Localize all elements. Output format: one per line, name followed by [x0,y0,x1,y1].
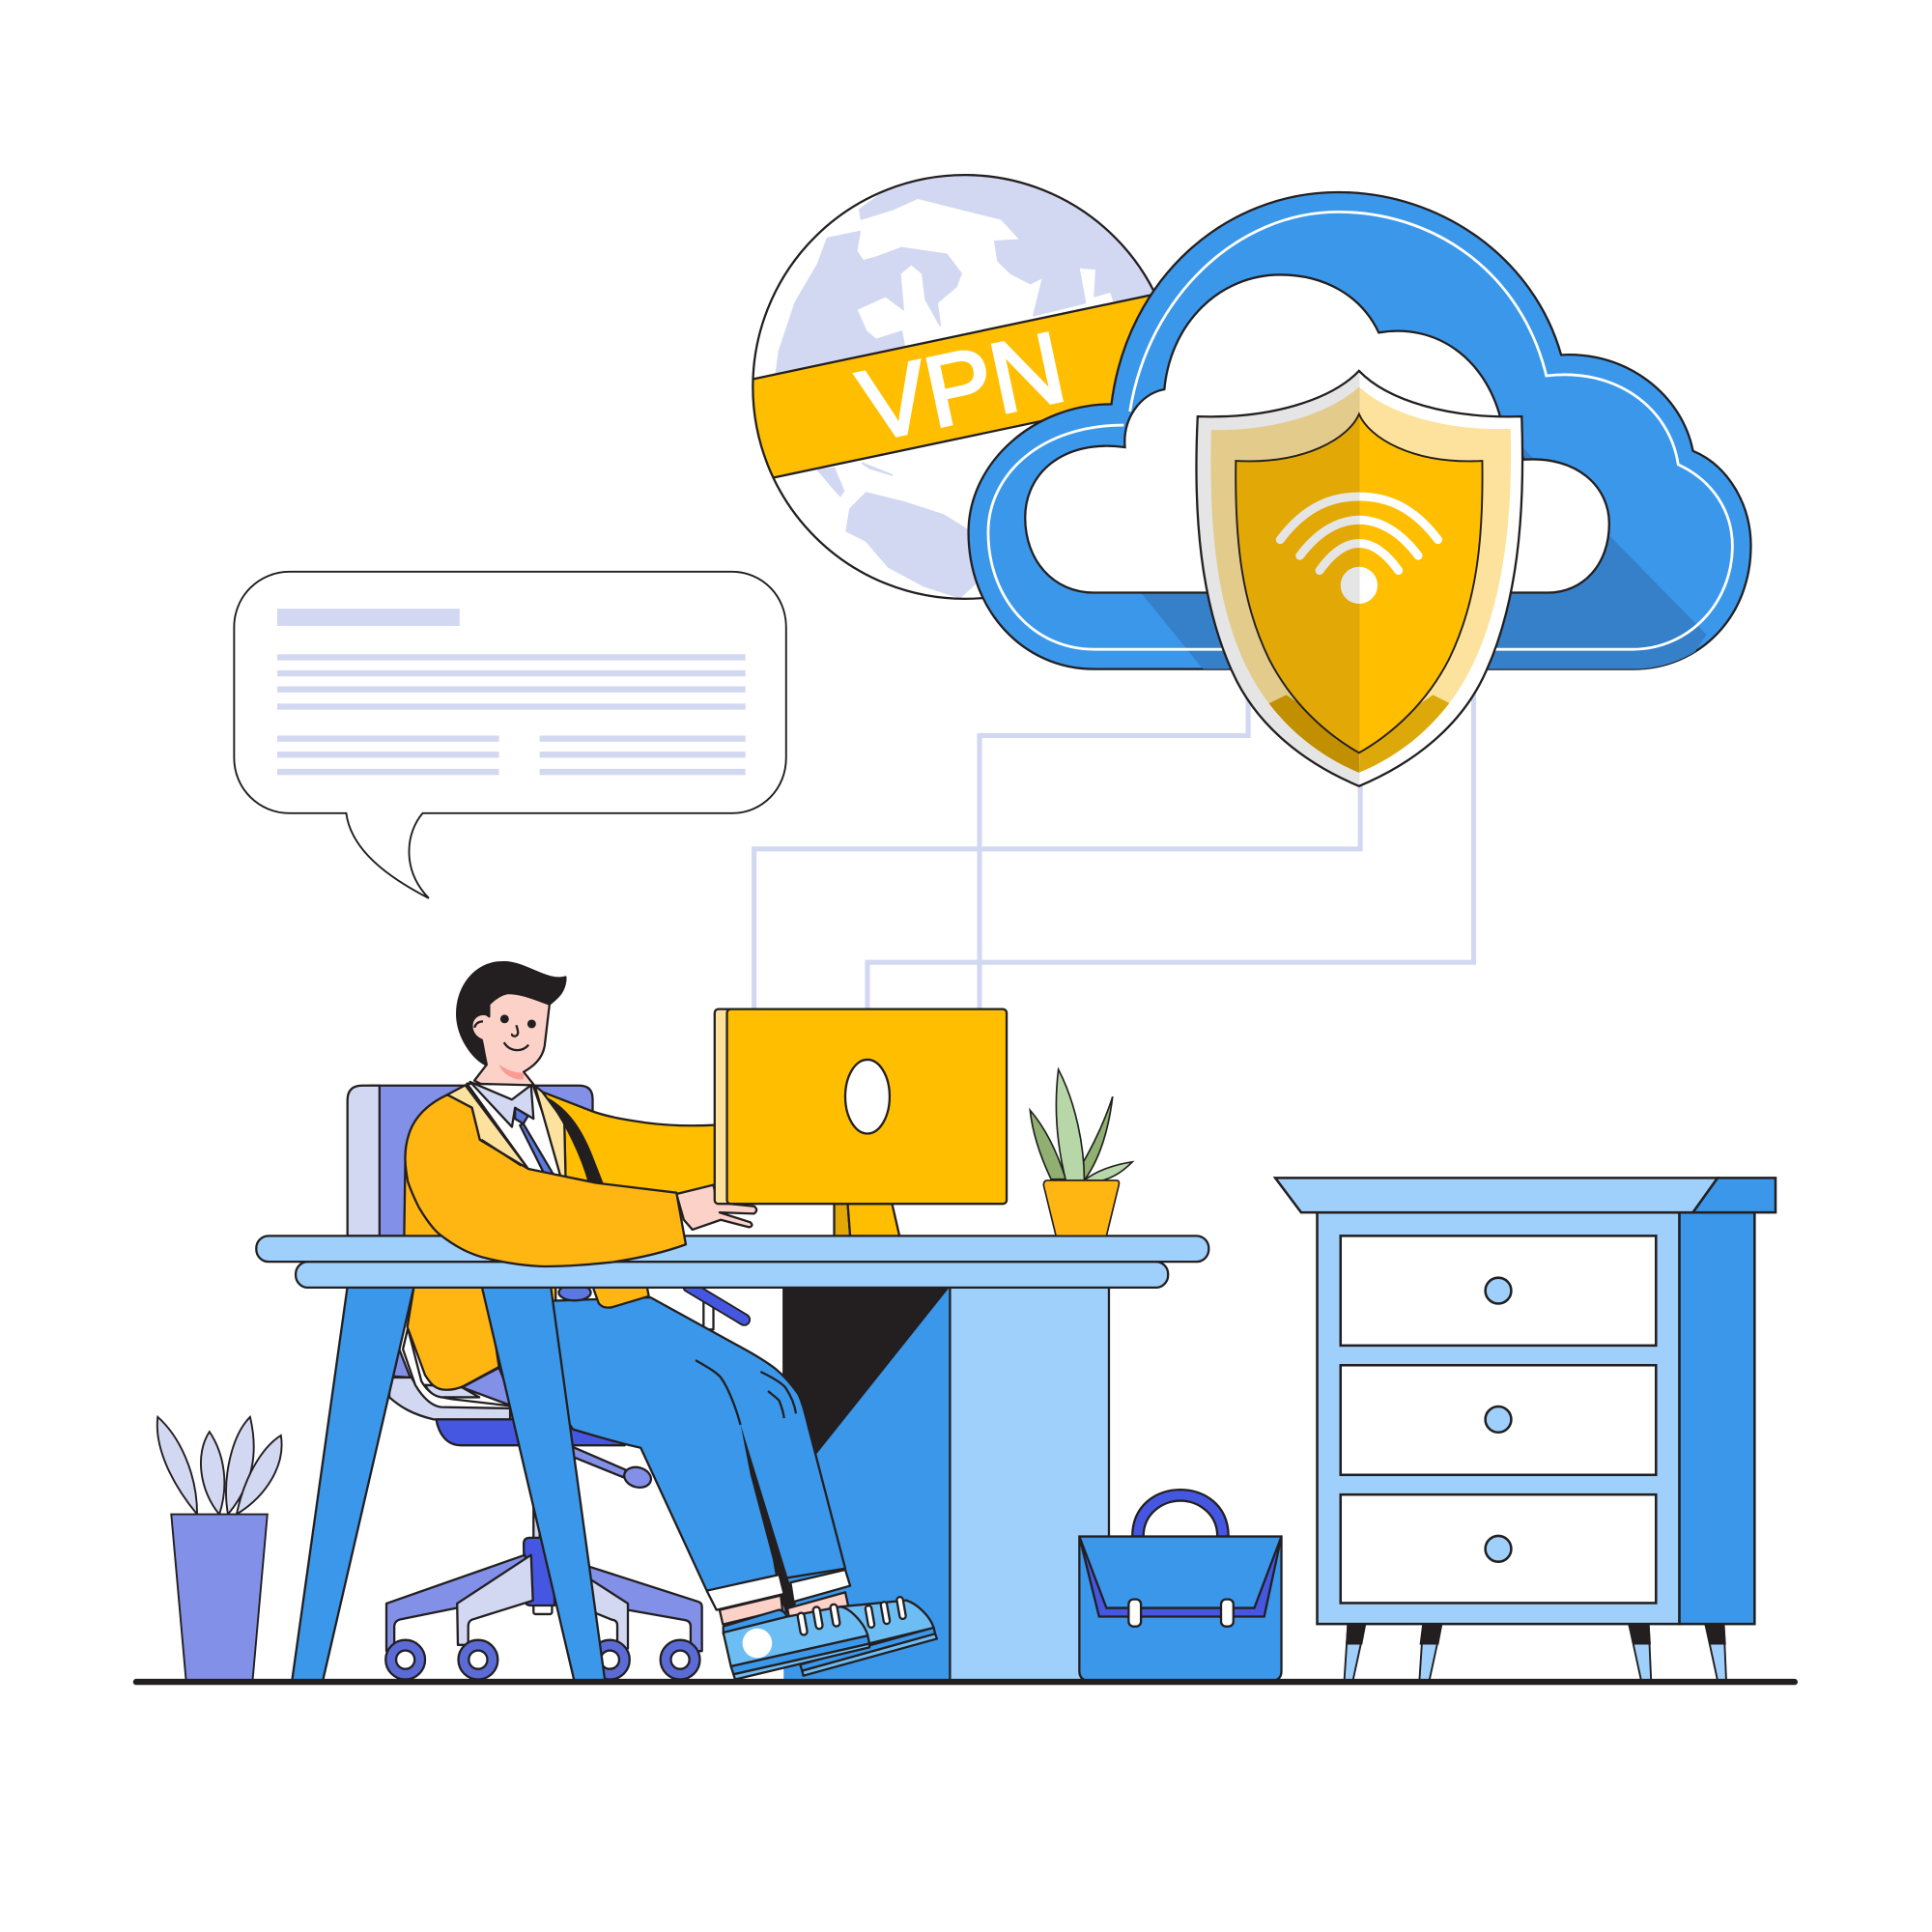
eyes [500,1014,536,1028]
briefcase [1079,1490,1282,1681]
cabinet legs [1345,1624,1726,1681]
briefcase clasps [1128,1600,1234,1627]
shield inner panel [1236,414,1483,753]
globe land masses [775,176,1152,598]
cabinet [1275,1178,1776,1681]
far arm [538,1091,717,1205]
desk pedestal [783,1287,1109,1681]
chair armrest [552,1287,744,1329]
briefcase flap [1079,1537,1282,1616]
office chair [348,1086,744,1680]
VPN label: VPN [850,310,1074,463]
desk plant pot [1043,1180,1119,1236]
bubble text placeholder [277,654,746,775]
jacket back [404,1095,456,1237]
far shoe [800,1597,937,1676]
chair backrest [348,1086,593,1236]
bag strap [549,1099,603,1184]
VPN band [753,294,1151,479]
shield gold border [1210,386,1511,773]
cloud opening [1025,274,1609,593]
chair column [524,1501,554,1614]
speech bubble [234,572,786,898]
floor line [133,1679,1798,1685]
drawer 1 [1341,1236,1656,1346]
globe [752,174,1153,600]
globe outline [753,175,1177,599]
chair wheels [385,1640,699,1680]
monitor [715,1009,1007,1204]
desk legs [292,1287,605,1681]
jacket lower [408,1287,555,1407]
sleeve [405,1094,686,1266]
icon: wifi [1280,497,1438,604]
head and neck [471,993,550,1100]
cabinet body [1318,1212,1680,1624]
shirt [467,1084,565,1177]
briefcase handle [1132,1490,1229,1537]
floor plant [157,1417,282,1681]
pants [529,1297,845,1614]
chair seat [389,1328,653,1491]
neck shadow [499,1065,524,1079]
cloud shadow [1141,438,1707,671]
cabinet top [1275,1178,1776,1212]
desk top [256,1236,1208,1288]
belt buckle [558,1285,591,1300]
ankles [720,1592,848,1625]
trouser cuffs [707,1570,850,1610]
drawer 2 [1341,1365,1656,1475]
collar [470,1082,533,1127]
lapels [447,1085,565,1177]
cloud inner white line [988,212,1732,649]
tie [515,1108,554,1176]
near shoe [724,1604,869,1680]
jacket hem [593,1287,649,1308]
cloud [969,192,1750,671]
hair [457,962,565,1065]
drawer 3 [1341,1494,1656,1603]
person lower body [408,1285,937,1680]
man upper body [405,962,756,1266]
cabinet side [1680,1212,1754,1624]
desk plant [1030,1069,1132,1236]
monitor logo [845,1060,890,1133]
sleeve crease [481,1140,522,1166]
nose and smile [474,1021,528,1050]
connection lines [754,690,1474,1012]
shield [1195,370,1522,788]
monitor stand [835,1204,899,1236]
briefcase body [1079,1537,1282,1681]
plant pot [171,1515,268,1681]
hand [676,1185,756,1230]
chair base [386,1555,702,1651]
bubble heading placeholder [277,609,460,626]
